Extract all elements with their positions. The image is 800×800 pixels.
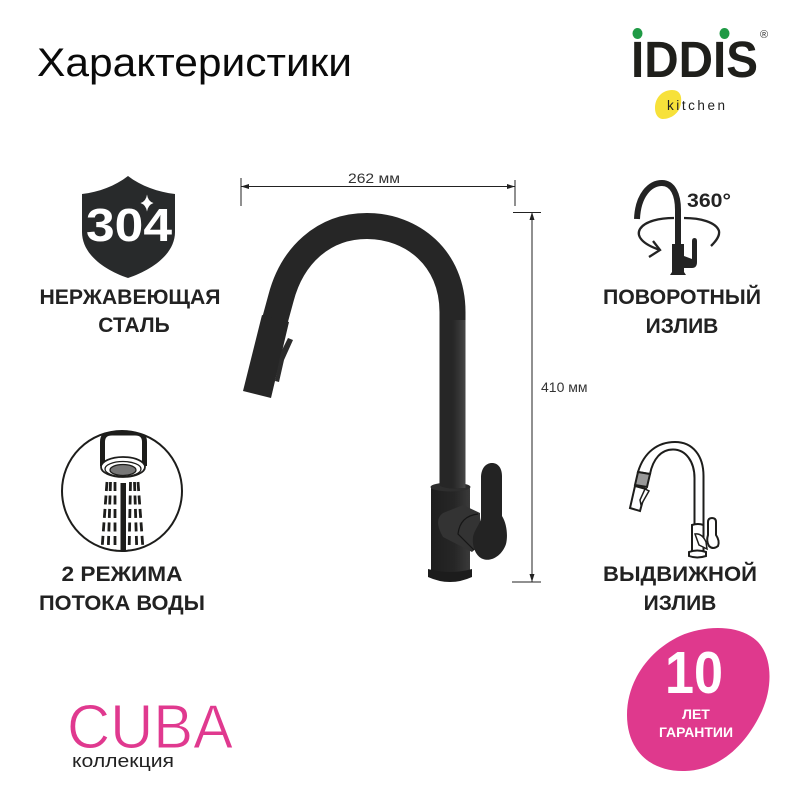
warranty badge — [627, 628, 770, 771]
faucet pull-out head — [243, 315, 289, 398]
label: pull-out spout: ВЫДВИЖНОЙ — [603, 562, 757, 586]
collection caption: коллекция — [72, 750, 174, 771]
icon: aerator with spray — [62, 431, 182, 556]
title: Характеристики — [37, 41, 352, 85]
panel: two flow modes: ПОТОКА ВОДЫ — [39, 592, 205, 615]
faucet column — [440, 320, 465, 488]
faucet foot — [428, 569, 472, 582]
panel: pull-out spout: ИЗЛИВ — [644, 592, 716, 615]
panel: rotating spout: ИЗЛИВ — [646, 315, 718, 338]
icon: shield 304 — [82, 176, 175, 278]
dimension: width 262 mm: 262 мм — [348, 170, 400, 186]
faucet connector seam — [458, 514, 478, 550]
dimension: width 262 mm — [241, 170, 515, 206]
CUBA wordmark: CUBA — [67, 693, 234, 762]
panel: rotating spout — [603, 183, 761, 338]
faucet handle — [473, 463, 507, 560]
icon: shield 304: 304 — [86, 199, 172, 251]
faucet column highlight — [452, 320, 466, 488]
logo wordmark: IDDIS — [631, 31, 758, 88]
logo: IDDIS kitchen — [631, 28, 768, 119]
kitchen yellow blob — [655, 90, 681, 119]
dimension: height 410 mm: 410 мм — [541, 379, 588, 395]
label: stainless steel: НЕРЖАВЕЮЩАЯ — [40, 286, 220, 309]
360 degree label: 360° — [687, 191, 731, 212]
label: two flow modes: 2 РЕЖИМА — [62, 563, 182, 586]
dimension: height 410 mm — [512, 212, 588, 582]
warranty years: 10 — [665, 640, 723, 706]
panel: pull-out spout — [603, 442, 757, 615]
faucet collar top — [430, 482, 470, 492]
warranty badge: ГАРАНТИИ — [659, 724, 733, 740]
panel: stainless steel: СТАЛЬ — [98, 314, 170, 337]
faucet base — [431, 488, 470, 576]
panel: stainless steel — [40, 176, 220, 337]
icon: pull-out faucet outline — [630, 442, 719, 558]
kitchen text: kitchen — [667, 98, 725, 113]
collection name — [67, 693, 234, 771]
panel: two flow modes — [39, 431, 205, 615]
warranty text: ЛЕТ — [682, 706, 710, 722]
faucet connector — [438, 505, 480, 552]
faucet trigger — [275, 338, 293, 382]
logo green dots — [632, 28, 730, 39]
faucet illustration — [243, 226, 507, 582]
faucet spout — [275, 226, 452, 500]
pink blob — [627, 628, 770, 771]
registered mark: ® — [760, 29, 768, 41]
label: rotating spout: ПОВОРОТНЫЙ — [603, 285, 761, 309]
icon: faucet 360 — [637, 183, 731, 275]
